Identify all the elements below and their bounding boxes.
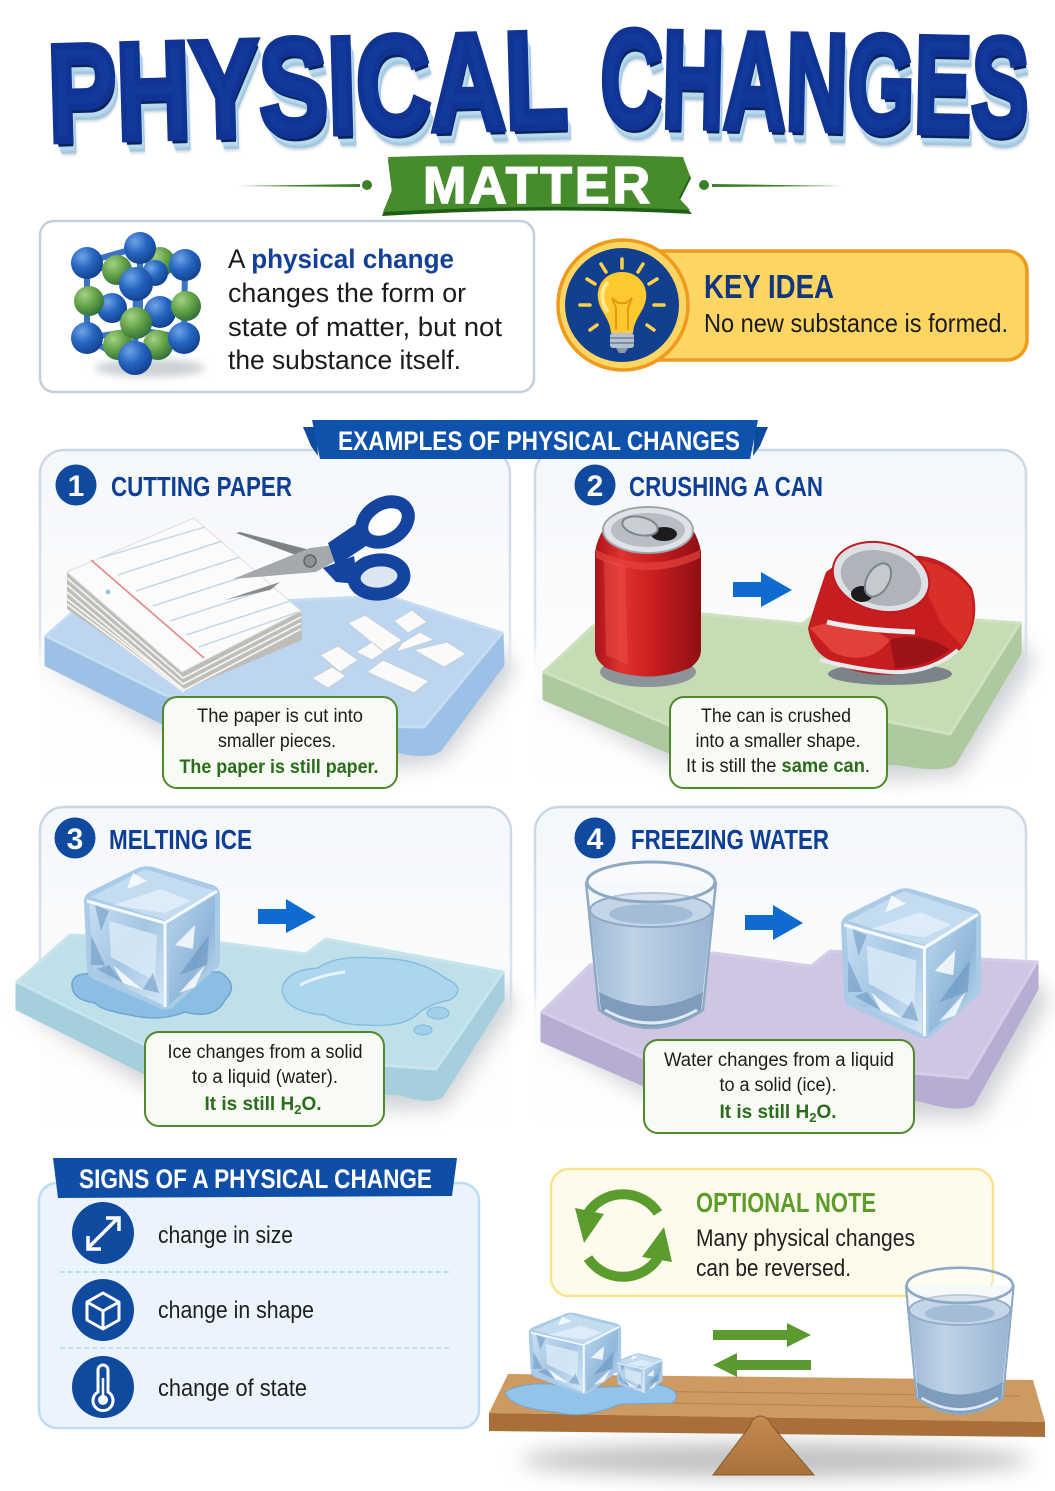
- illustration: ice cube: [841, 888, 981, 1039]
- number badge 3: 3: [67, 823, 83, 856]
- glass of water: [906, 1268, 1014, 1415]
- green platform: [544, 610, 1035, 780]
- number badge 2: 2: [587, 470, 603, 503]
- arrow: [745, 905, 803, 940]
- illustration: crushed can: [808, 532, 975, 685]
- panel: key idea: [558, 240, 1027, 370]
- arrows: reversible: [713, 1323, 811, 1377]
- melting ice: [505, 1313, 676, 1415]
- callout: crushing a can: into a smaller shape.: [696, 731, 860, 752]
- icon: light bulb: [580, 259, 664, 353]
- illustration: melting ice cube: [72, 866, 231, 1018]
- panel 3: melting ice: [17, 807, 515, 1137]
- callout: crushing a can: It is still the same can.: [686, 756, 870, 777]
- sign: change in size: [72, 1202, 293, 1264]
- panel: definition: [40, 221, 534, 392]
- sign: change in size: change in size: [158, 1222, 293, 1249]
- callout: cutting paper: The paper is still paper.: [180, 757, 378, 778]
- wooden plank: [489, 1374, 1045, 1437]
- blue platform: [46, 596, 515, 768]
- subtitle ribbon: MATTER: MATTER: [423, 157, 650, 215]
- number badge 4: 4: [587, 823, 604, 856]
- section banner: examples of physical changes: EXAMPLES OF PHYSICAL CHANGES: [338, 426, 740, 456]
- section banner: examples of physical changes: [303, 420, 768, 459]
- note text: [696, 1187, 915, 1282]
- callout: melting ice: O.: [301, 1094, 322, 1115]
- note text: Many physical changes: [696, 1225, 915, 1252]
- panel: signs of a physical change: [39, 1158, 479, 1428]
- callout: cutting paper: smaller pieces.: [218, 731, 336, 752]
- callout: melting ice: [145, 1032, 384, 1126]
- callout: melting ice: It is still H: [204, 1094, 294, 1115]
- definition text: the substance itself.: [228, 345, 461, 375]
- definition text: A physical change: [228, 244, 454, 274]
- callout: freezing water: Water changes from a liquid: [664, 1050, 894, 1071]
- callout: crushing a can: [670, 697, 887, 788]
- illustration: red can: [595, 507, 701, 687]
- note text: can be reversed.: [696, 1255, 851, 1282]
- subtitle ribbon: MATTER: [238, 154, 842, 216]
- definition text: [228, 244, 503, 375]
- panel 2: crushing a can: [535, 450, 1035, 790]
- sign: change in shape: change in shape: [158, 1297, 314, 1324]
- panel 4: freezing water: [535, 807, 1050, 1137]
- callout: cutting paper: The paper is cut into: [197, 706, 363, 727]
- heading: cutting paper: CUTTING PAPER: [111, 471, 292, 502]
- callout: melting ice: 2: [294, 1102, 301, 1117]
- title: PHYSICAL: PHYSICAL: [46, 3, 569, 171]
- key idea text: [704, 268, 1008, 338]
- callout: freezing water: It is still H: [719, 1102, 809, 1123]
- teal platform: [17, 935, 515, 1110]
- key idea text: No new substance is formed.: [704, 308, 1008, 338]
- illustration: scissors: [233, 493, 416, 597]
- callout: cutting paper: [163, 697, 397, 788]
- number badge 3: [54, 818, 96, 858]
- callout: freezing water: 2: [809, 1110, 816, 1125]
- panel 1: cutting paper: [40, 450, 515, 790]
- note text: OPTIONAL NOTE: [696, 1187, 876, 1218]
- illustration: paper stack: [67, 518, 302, 692]
- arrow: [258, 899, 316, 933]
- definition text: state of matter, but not: [228, 312, 503, 342]
- number badge 1: 1: [68, 470, 84, 503]
- illustration: water puddle: [282, 957, 458, 1035]
- callout: freezing water: to a solid (ice).: [720, 1075, 836, 1096]
- heading: freezing water: FREEZING WATER: [631, 824, 829, 855]
- panel: optional note: [551, 1169, 993, 1296]
- sign: change in shape: [72, 1279, 314, 1341]
- number badge 4: [574, 818, 616, 858]
- callout: melting ice: Ice changes from a solid: [168, 1042, 362, 1063]
- icon: molecule lattice: [71, 232, 205, 377]
- sign: change of state: [72, 1356, 307, 1418]
- fulcrum: [713, 1416, 814, 1475]
- icon: reverse cycle: [575, 1194, 672, 1277]
- definition text: changes the form or: [228, 278, 466, 308]
- callout: melting ice: to a liquid (water).: [192, 1067, 338, 1088]
- callout: crushing a can: The can is crushed: [701, 706, 851, 727]
- illustration: glass of water: [586, 862, 716, 1029]
- number badge 1: [56, 464, 96, 506]
- heading: melting ice: MELTING ICE: [109, 824, 252, 855]
- arrow: [733, 572, 792, 607]
- callout: freezing water: O.: [816, 1102, 837, 1123]
- number badge 2: [574, 464, 616, 506]
- illustration: paper pieces: [312, 610, 466, 693]
- key idea text: KEY IDEA: [704, 268, 834, 305]
- heading: crushing a can: CRUSHING A CAN: [629, 471, 823, 502]
- banner heading: [53, 1158, 457, 1198]
- illustration: reversible seesaw: [489, 1268, 1045, 1477]
- banner heading: SIGNS OF A PHYSICAL CHANGE: [79, 1164, 432, 1194]
- title: CHANGES: CHANGES: [599, 2, 1030, 164]
- purple platform: [542, 951, 1050, 1118]
- callout: freezing water: [644, 1040, 914, 1133]
- sign: change of state: change of state: [158, 1375, 307, 1402]
